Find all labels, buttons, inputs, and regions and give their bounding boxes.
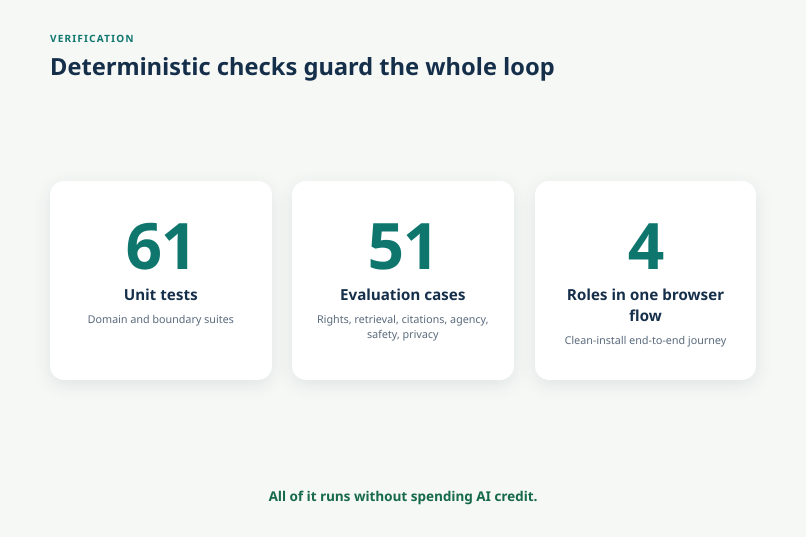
stat: 51: 51: [367, 201, 438, 288]
eyebrow label: VERIFICATION: [50, 31, 135, 45]
stat: 61: 61: [125, 201, 196, 288]
description: unit tests: Domain and boundary suites: [88, 313, 234, 327]
label: evaluation cases: Evaluation cases: [340, 285, 465, 305]
title: Deterministic checks guard the whole loop: [50, 50, 555, 82]
label: unit tests: Unit tests: [124, 285, 198, 305]
description: evaluation cases: Rights, retrieval, citations, agency, safety, privacy: [317, 313, 488, 342]
panel: evaluation cases: [292, 181, 514, 380]
description: browser roles: Clean-install end-to-end journey: [565, 334, 726, 348]
panel: unit tests: [50, 181, 272, 380]
footer note: All of it runs without spending AI credit.: [269, 487, 537, 505]
stat: 4: 4: [628, 201, 663, 288]
label: browser roles: Roles in one browser flow: [567, 285, 724, 326]
panel: browser roles: [535, 181, 756, 380]
